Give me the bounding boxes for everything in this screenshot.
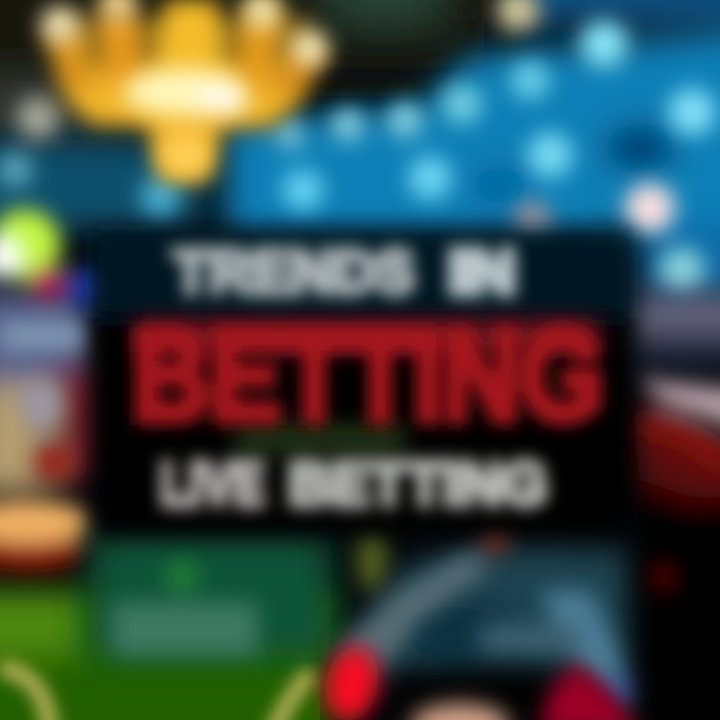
title: main word: BETTING — [132, 305, 604, 448]
panel: dark title backing — [92, 232, 632, 533]
pitch lines — [0, 668, 312, 720]
title: line three: BETTING — [288, 450, 548, 519]
panel: grey-blue bottom board — [330, 526, 645, 712]
left strip: blurred collage — [0, 209, 109, 495]
stadium: dark roof band — [0, 0, 500, 135]
stadium: blue crowd — [0, 0, 720, 295]
title: line one: TRENDS — [173, 238, 415, 307]
title: line three: LIVE — [160, 450, 265, 519]
red glow band behind main word — [135, 320, 600, 453]
pitch: green field — [0, 590, 335, 720]
icon: golden crown — [41, 0, 328, 182]
gold plate on left — [0, 500, 92, 572]
title: line three — [160, 450, 548, 519]
figure: player with red shoulders — [319, 641, 642, 720]
stadium lights — [0, 0, 716, 293]
right side: maroon shape and dark corner — [630, 295, 720, 720]
title: line one: IN — [448, 238, 516, 307]
panel: green bottom board — [90, 535, 330, 657]
